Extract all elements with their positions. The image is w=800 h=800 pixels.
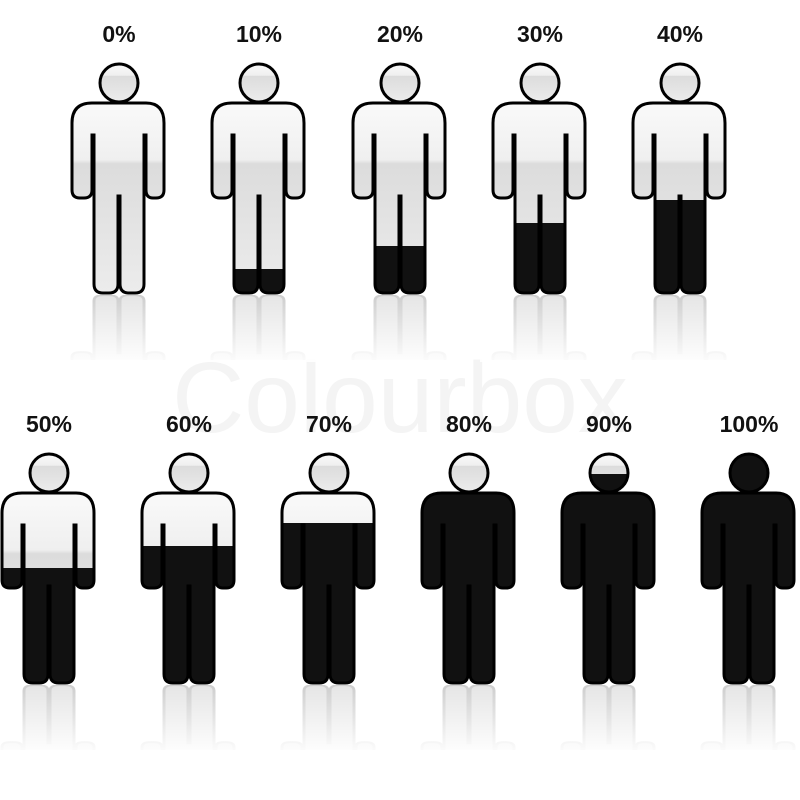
figure: 90% xyxy=(560,416,656,744)
figure: 80% xyxy=(420,416,516,744)
figure: 40% xyxy=(632,26,726,354)
figure: 70%: 70% xyxy=(306,411,352,437)
figure: 50% xyxy=(0,416,96,744)
figure: 0% xyxy=(59,21,179,433)
figure: 30%: 30% xyxy=(517,21,563,47)
figure: 100% xyxy=(700,416,796,744)
figure: 40%: 40% xyxy=(657,21,703,47)
figure: 10% xyxy=(210,26,316,362)
figure: 10%: 10% xyxy=(236,21,282,47)
figure: 20% xyxy=(352,26,446,354)
figure: 30% xyxy=(480,26,586,362)
watermark: Colourbox xyxy=(172,342,628,454)
figure: 60%: 60% xyxy=(166,411,212,437)
figure: 20%: 20% xyxy=(377,21,423,47)
figure: 80%: 80% xyxy=(446,411,492,437)
figure: 0%: 0% xyxy=(102,21,136,47)
figure: 90%: 90% xyxy=(586,411,632,437)
figure: 100%: 100% xyxy=(720,411,778,437)
figure: 70% xyxy=(280,416,376,744)
figure: 50%: 50% xyxy=(26,411,72,437)
figure: 60% xyxy=(140,416,236,744)
